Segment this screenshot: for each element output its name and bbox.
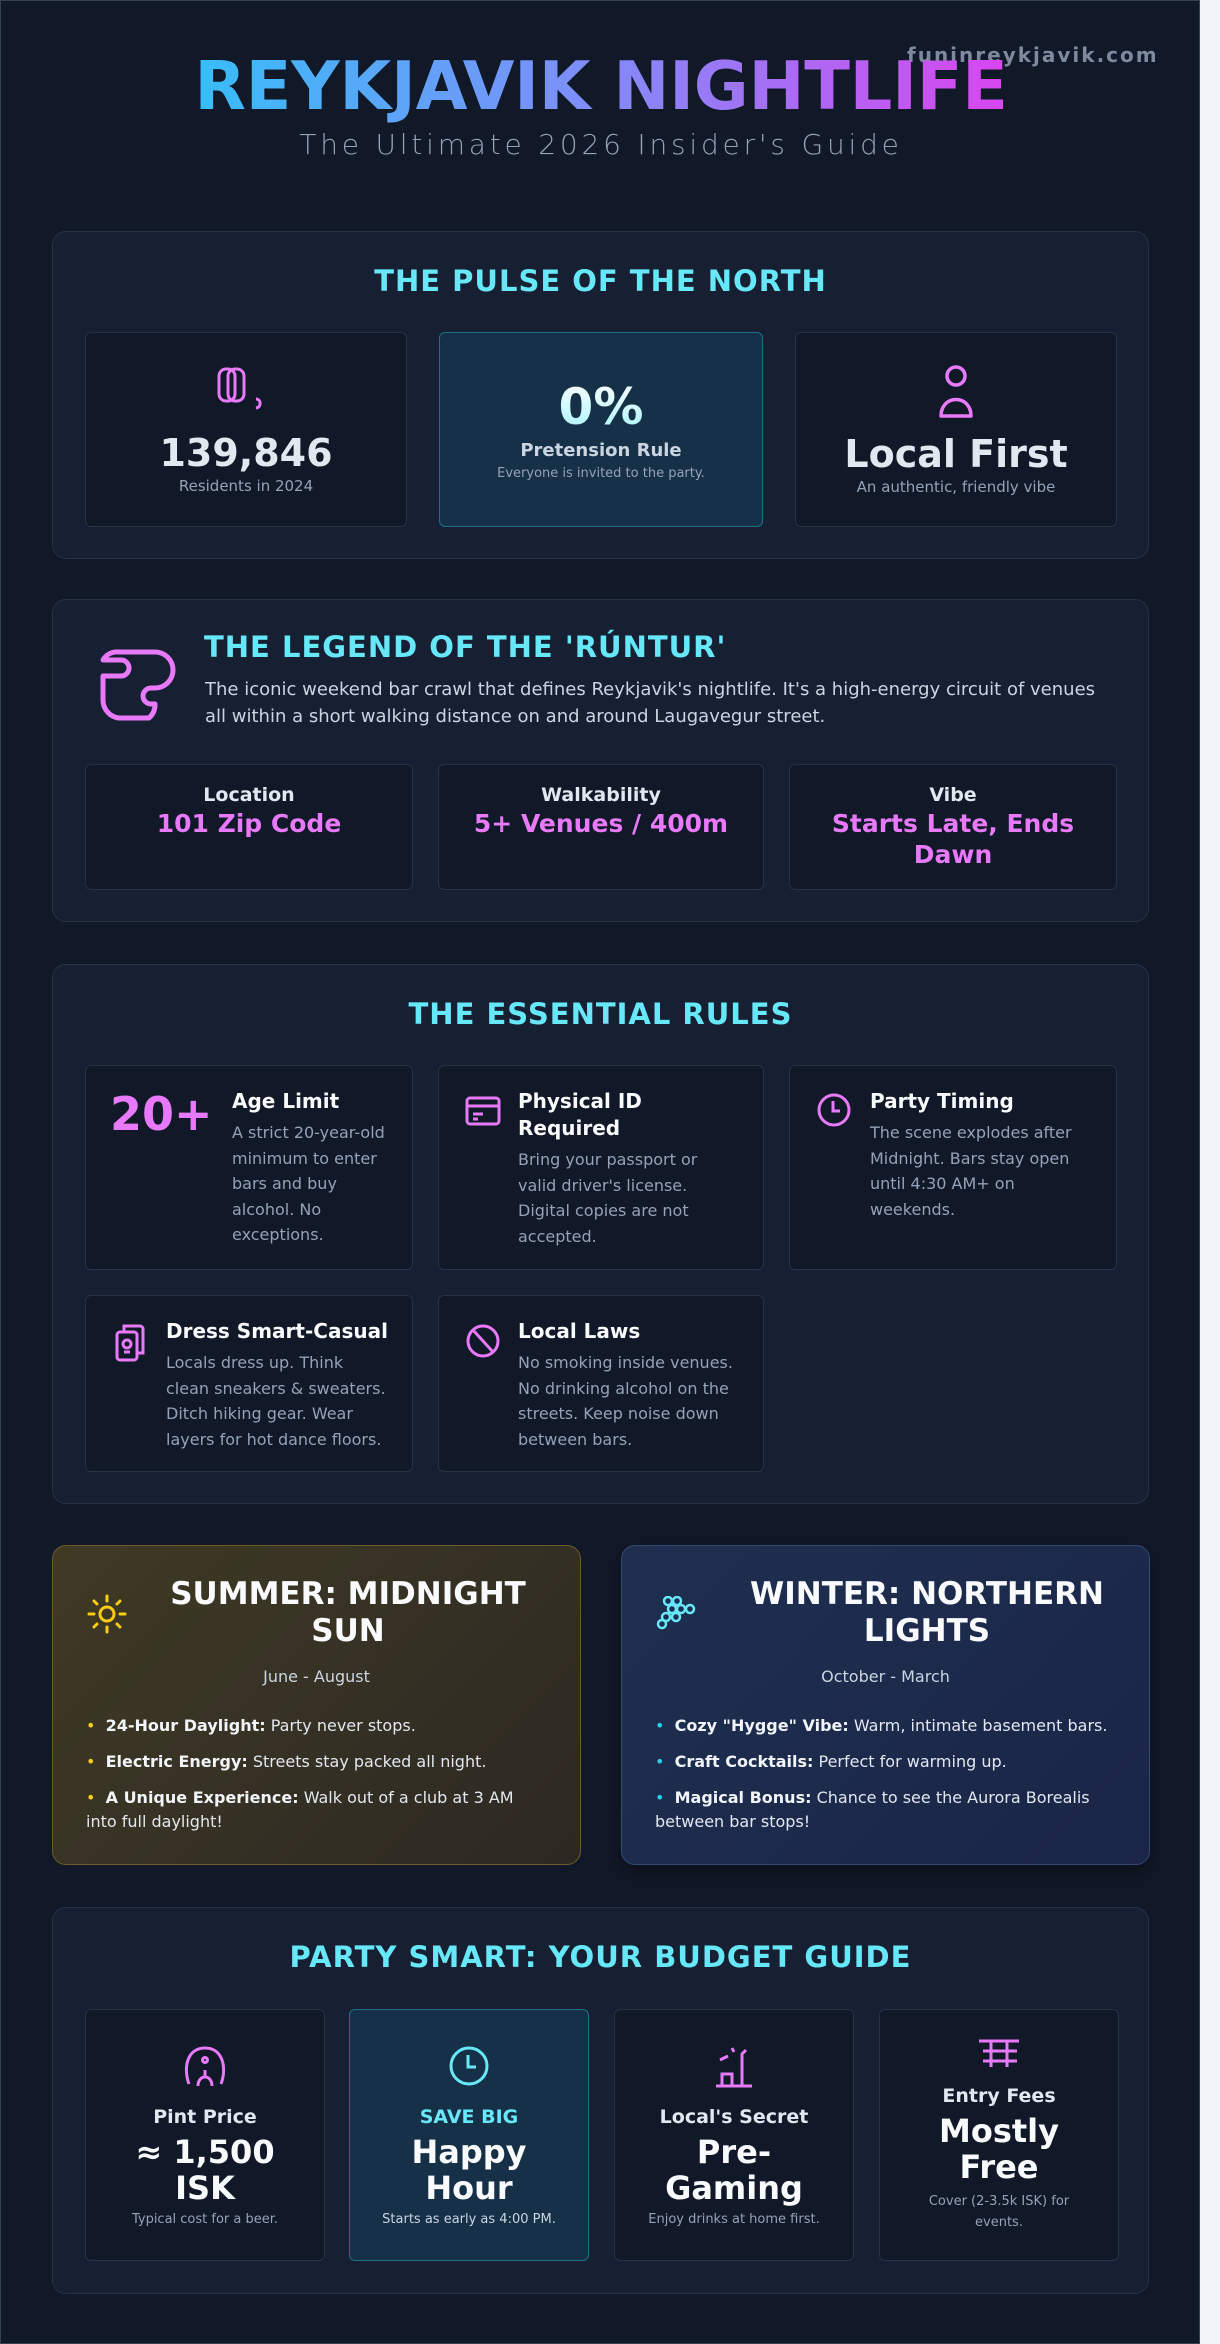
list: winter highlights: • Cozy "Hygge" Vibe: Warm, intimate basement bars. — [655, 1716, 1107, 1735]
budget card: pint price: ISK — [175, 2168, 235, 2206]
stat card: residents: Residents in 2024 — [179, 476, 313, 494]
list: winter highlights: • Craft Cocktails: Perfect for warming up. — [655, 1752, 1007, 1771]
budget card: pre-gaming — [614, 2009, 854, 2261]
budget card: happy hour: Hour — [425, 2168, 513, 2206]
rule: party timing — [789, 1065, 1117, 1270]
heading: summer: SUMMER: MIDNIGHT — [170, 1576, 526, 1612]
budget card: pre-gaming: Pre- — [697, 2132, 771, 2170]
stat card: pretension: 0% — [559, 378, 643, 436]
list: winter highlights — [655, 1716, 1107, 1831]
rule: dress: Locals dress up. Think clean sneakers & sweaters. Ditch hiking gear. Wear layers for hot dance floors. — [166, 1353, 386, 1448]
budget card: pre-gaming: Gaming — [665, 2168, 803, 2206]
stat card: local first: An authentic, friendly vibe — [857, 478, 1055, 496]
fact: location: Location — [203, 784, 295, 806]
icon: clipboard — [116, 1324, 144, 1362]
fact: location — [85, 764, 413, 890]
budget card: entry fees: Cover (2-3.5k ISK) for events. — [929, 2194, 1069, 2230]
icon: ticket lines — [979, 2040, 1019, 2067]
fact: walkability: Walkability — [541, 784, 661, 806]
icon: aurora dots — [656, 1596, 696, 1630]
date range: June - August — [263, 1667, 370, 1686]
heading: budget: PARTY SMART: YOUR BUDGET GUIDE — [290, 1940, 911, 1974]
icon: sun — [88, 1594, 126, 1634]
date range: October - March — [821, 1667, 950, 1686]
heading: runtur: THE LEGEND OF THE 'RÚNTUR' — [204, 630, 726, 664]
rule: physical id: Required — [518, 1116, 620, 1140]
list: summer highlights — [86, 1716, 514, 1831]
budget card: pint price: ≈ 1,500 — [135, 2132, 275, 2170]
panel: summer — [52, 1545, 581, 1865]
budget card: entry fees: Free — [960, 2148, 1038, 2186]
stat card: local first — [795, 332, 1117, 527]
budget card: pint price: Pint Price — [153, 2106, 257, 2128]
rule: party timing: Party Timing — [870, 1089, 1014, 1113]
rule: physical id — [438, 1065, 764, 1270]
budget card: pre-gaming: Enjoy drinks at home first. — [648, 2212, 820, 2226]
stat card: pretension: Everyone is invited to the party. — [497, 466, 705, 481]
fact: vibe: Starts Late, Ends — [832, 809, 1074, 838]
icon: loop path — [100, 649, 176, 720]
budget card: happy hour — [349, 2009, 589, 2261]
budget card: entry fees: Entry Fees — [942, 2085, 1056, 2107]
budget card: entry fees — [879, 2009, 1119, 2261]
icon: id card — [466, 1096, 500, 1126]
watermark: funinreykjavik.com — [907, 43, 1159, 67]
rule: dress: Dress Smart-Casual — [166, 1319, 388, 1343]
rule: age limit: 20+ — [110, 1087, 213, 1141]
panel: budget guide — [52, 1907, 1149, 2294]
panel: winter — [621, 1545, 1150, 1865]
panel: essential rules — [52, 964, 1149, 1504]
stat card: residents — [85, 332, 407, 527]
fact: walkability — [438, 764, 764, 890]
heading: winter: WINTER: NORTHERN — [750, 1576, 1104, 1612]
budget card: entry fees: Mostly — [939, 2112, 1059, 2150]
icon: clock — [818, 1094, 850, 1126]
rule: physical id: Physical ID — [518, 1089, 642, 1113]
rule: local laws: Local Laws — [518, 1319, 640, 1343]
stat card: pretension: Pretension Rule — [520, 440, 682, 461]
rule: local laws — [438, 1295, 764, 1472]
heading: winter — [750, 1576, 1104, 1649]
heading: rules: THE ESSENTIAL RULES — [409, 997, 792, 1031]
icon: clock — [450, 2046, 488, 2086]
heading: summer: SUN — [311, 1613, 385, 1649]
heading: summer — [170, 1576, 526, 1649]
budget card: pre-gaming: Local's Secret — [660, 2106, 808, 2128]
rule: age limit — [85, 1065, 413, 1270]
heading: winter: LIGHTS — [864, 1613, 990, 1649]
fact: walkability: 5+ Venues / 400m — [474, 809, 728, 838]
stat card: local first: Local First — [844, 432, 1068, 476]
icon: pint — [184, 2046, 226, 2086]
budget card: happy hour: Starts as early as 4:00 PM. — [382, 2212, 556, 2226]
rule: age limit: A strict 20-year-old minimum to enter bars and buy alcohol. No exceptions. — [232, 1123, 385, 1244]
list: summer highlights: • 24-Hour Daylight: Party never stops. — [86, 1716, 416, 1735]
fact: vibe: Dawn — [914, 840, 992, 869]
icon: person — [939, 365, 973, 418]
subtitle: The Ultimate 2026 Insider's Guide — [299, 128, 903, 161]
heading: pulse: THE PULSE OF THE NORTH — [374, 264, 827, 298]
budget card: happy hour: SAVE BIG — [420, 2106, 518, 2128]
list: summer highlights: • A Unique Experience: Walk out of a club at 3 AM into full daylight! — [86, 1788, 514, 1831]
budget card: happy hour: Happy — [411, 2132, 527, 2170]
icon: ban — [466, 1324, 500, 1358]
rule: party timing: The scene explodes after Midnight. Bars stay open until 4:30 AM+ on weekends. — [870, 1123, 1072, 1218]
title: REYKJAVIK NIGHTLIFE — [194, 47, 1008, 125]
rule: physical id: Bring your passport or valid driver's license. Digital copies are not accepted. — [518, 1150, 697, 1246]
description: The iconic weekend bar crawl that defines Reykjavik's nightlife. It's a high-energy circuit of venues all within a short walking distance on and around Laugavegur street. — [205, 679, 1095, 727]
fact: vibe: Vibe — [929, 784, 977, 806]
icon: home bottle — [716, 2047, 752, 2088]
list: summer highlights: • Electric Energy: Streets stay packed all night. — [86, 1752, 486, 1771]
fact: location: 101 Zip Code — [157, 809, 341, 838]
budget card: pint price: Typical cost for a beer. — [132, 2212, 278, 2226]
rule: local laws: No smoking inside venues. No drinking alcohol on the streets. Keep noise down between bars. — [518, 1353, 733, 1448]
fact: vibe — [789, 764, 1117, 890]
stat card: pretension — [439, 332, 763, 527]
budget card: pint price — [85, 2009, 325, 2261]
icon: people — [218, 368, 262, 410]
list: winter highlights: • Magical Bonus: Chance to see the Aurora Borealis between bar stops! — [655, 1788, 1090, 1831]
stat card: residents: 139,846 — [159, 430, 333, 474]
rule: age limit: Age Limit — [232, 1089, 339, 1113]
panel: pulse of the north — [52, 231, 1149, 559]
rule: dress — [85, 1295, 413, 1472]
panel: runtur legend — [52, 599, 1149, 922]
